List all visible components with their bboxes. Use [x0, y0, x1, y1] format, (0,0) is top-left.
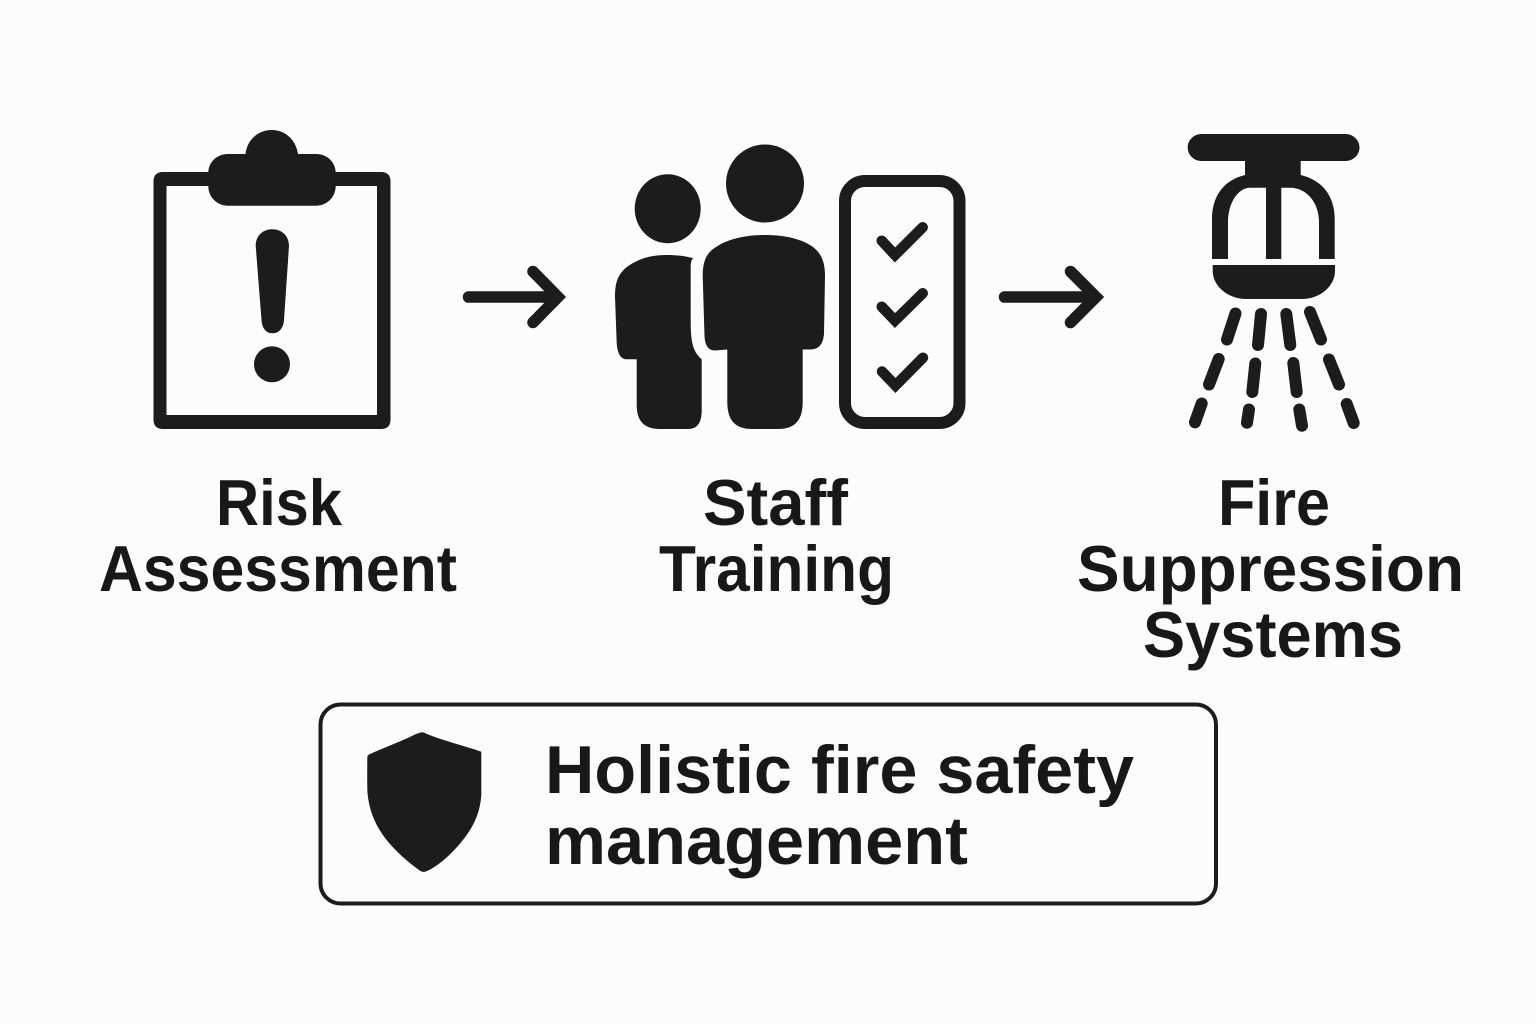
label: risk assessment: Assessment [99, 532, 457, 605]
callout text: management [545, 803, 968, 879]
label: risk assessment: Risk [216, 466, 343, 539]
label: staff training: Staff [703, 466, 848, 539]
arrow: staff training to fire suppression systems [1004, 272, 1096, 322]
icon: sprinkler head [1188, 134, 1360, 299]
icon: two staff members with checklist [615, 144, 960, 429]
arrow: risk assessment to staff training [468, 272, 558, 322]
label: fire suppression systems: Suppression [1077, 532, 1464, 605]
icon: clipboard with exclamation mark [154, 130, 390, 429]
icon: fire sprinkler [1188, 134, 1360, 426]
icon: water spray [1195, 312, 1354, 426]
label: staff training: Training [659, 532, 894, 605]
icon: shield [367, 732, 481, 872]
icon: right person [703, 144, 825, 429]
icon: left person [615, 174, 702, 429]
callout: holistic fire safety management [320, 704, 1216, 904]
label: fire suppression systems: Systems [1143, 598, 1403, 671]
callout text: Holistic fire safety [545, 732, 1134, 808]
callout border [320, 704, 1216, 904]
label: fire suppression systems: Fire [1218, 466, 1330, 539]
icon: checklist [845, 181, 960, 423]
